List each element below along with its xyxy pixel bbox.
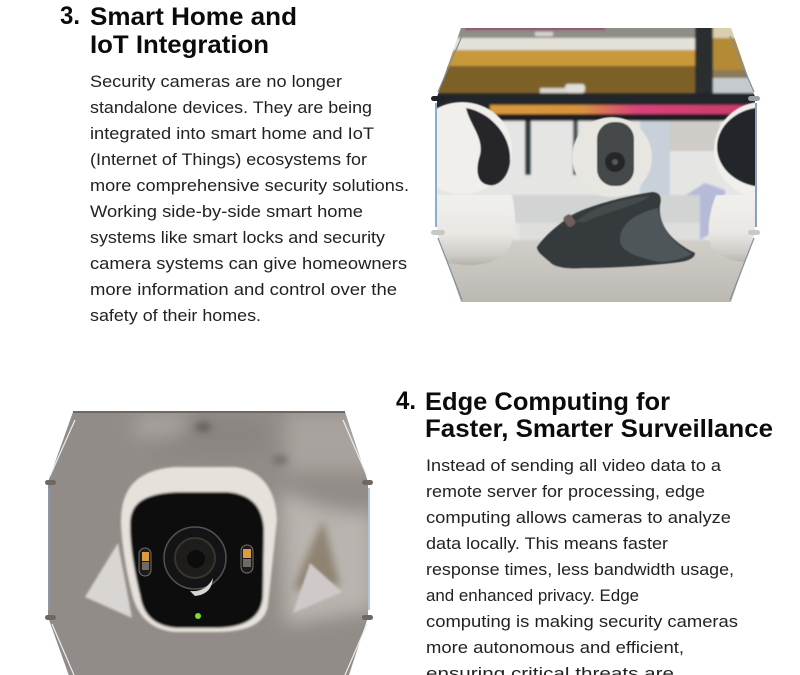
text block: section 4 body: more autonomous and efficient, [426, 639, 684, 657]
camera mount [85, 543, 342, 618]
mouse [537, 192, 695, 268]
text block: section 4 body: and enhanced privacy. Edge [426, 587, 639, 605]
text block: section 4 body: Instead of sending all video data to a [426, 457, 722, 475]
text block: section 3 body: more information and control over the [90, 281, 397, 299]
heading: 4. Edge Computing for Faster, Smarter Surveillance: 4. [396, 387, 416, 415]
text block: section 4 body [426, 457, 738, 675]
text block: section 4 body: response times, less bandwidth usage, [426, 561, 734, 579]
heading: 3. Smart Home and IoT Integration: Smart Home and [90, 3, 297, 31]
text block: section 3 body: more comprehensive security solutions. [90, 177, 409, 195]
heading: 4. Edge Computing for Faster, Smarter Surveillance: Edge Computing for [425, 388, 670, 416]
heading: 4. Edge Computing for Faster, Smarter Surveillance: Faster, Smarter Surveillance [425, 415, 773, 443]
text block: section 3 body: integrated into smart home and IoT [90, 125, 374, 143]
text block: section 3 body: camera systems can give homeowners [90, 255, 407, 273]
heading: 3. Smart Home and IoT Integration: IoT Integration [90, 31, 269, 59]
text block: section 3 body: standalone devices. They are being [90, 99, 372, 117]
frame accents [49, 420, 369, 675]
status lights [139, 545, 253, 619]
heading: 3. Smart Home and IoT Integration: 3. [60, 2, 80, 30]
text block: section 4 body: computing allows cameras to analyze [426, 509, 731, 527]
lens [164, 527, 226, 596]
frame accents [436, 36, 756, 300]
photo: white outdoor security camera close-up [40, 405, 375, 675]
camera: centre [572, 117, 652, 197]
camera body [121, 467, 277, 632]
camera: right [708, 102, 755, 262]
text block: section 3 body [90, 73, 409, 325]
text block: section 4 body: remote server for processing, edge [426, 483, 705, 501]
text block: section 3 body: systems like smart locks and security [90, 229, 386, 247]
text block: section 3 body: Working side-by-side smart home [90, 203, 363, 221]
text block: section 3 body: safety of their homes. [90, 307, 261, 325]
heading: 3. Smart Home and IoT Integration [60, 2, 297, 59]
heading: 4. Edge Computing for Faster, Smarter Surveillance [396, 387, 773, 443]
text block: section 4 body: data locally. This means faster [426, 535, 669, 553]
text block: section 3 body: (Internet of Things) ecosystems for [90, 151, 368, 169]
text block: section 3 body: Security cameras are no longer [90, 73, 343, 91]
text block: section 4 body: computing is making security cameras [426, 613, 738, 631]
camera: left [437, 101, 516, 266]
photo: white smart cameras and a dark mouse on a desk [431, 28, 760, 302]
